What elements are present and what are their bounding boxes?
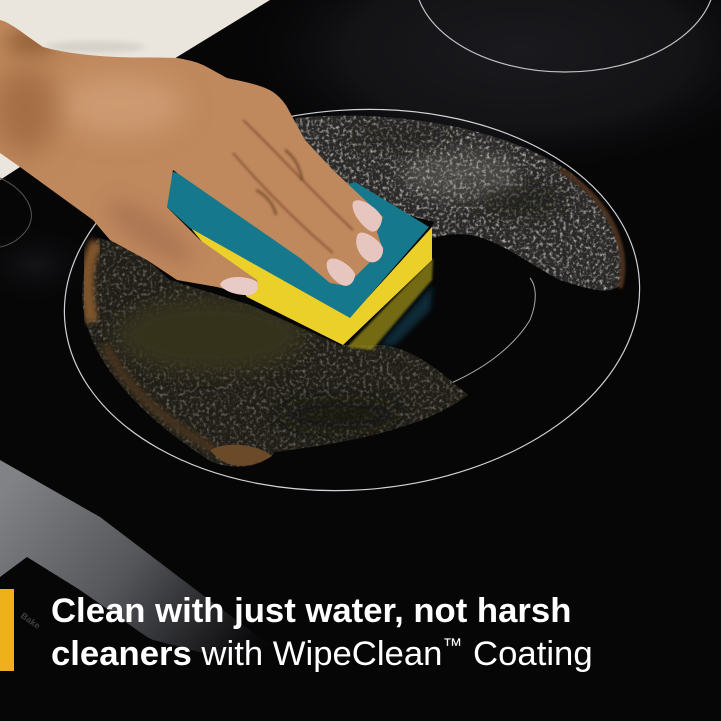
sponge teal top xyxy=(165,172,429,318)
nail: little finger xyxy=(327,259,355,286)
accent bar xyxy=(0,589,14,671)
caption text xyxy=(51,592,593,672)
burnt residue left xyxy=(70,230,480,470)
main burner outer ring xyxy=(51,90,653,510)
burner ring top right xyxy=(415,0,715,72)
nail: middle finger xyxy=(353,200,382,232)
burner ring left small xyxy=(0,178,31,247)
steel control panel xyxy=(0,460,270,721)
nail: ring finger xyxy=(356,233,383,262)
control label: Bake: Bake xyxy=(19,610,42,631)
finger creases xyxy=(233,120,353,253)
sponge xyxy=(165,172,432,345)
hand shading xyxy=(0,28,200,274)
hand shape xyxy=(0,20,383,295)
burnt residue right xyxy=(295,116,626,290)
knuckle wrinkles xyxy=(256,150,302,215)
hand xyxy=(0,20,383,295)
sponge yellow side xyxy=(190,227,432,345)
nail: thumb xyxy=(220,277,258,295)
cooktop sheen xyxy=(230,0,721,180)
main burner inner ring xyxy=(340,278,535,410)
caption text: cleaners with WipeClean™ Coating xyxy=(51,634,593,672)
left cooktop reflection xyxy=(0,220,105,310)
caption text: Clean with just water, not harsh xyxy=(51,592,571,630)
counter top-left xyxy=(0,0,270,180)
sponge reflection xyxy=(347,258,433,350)
